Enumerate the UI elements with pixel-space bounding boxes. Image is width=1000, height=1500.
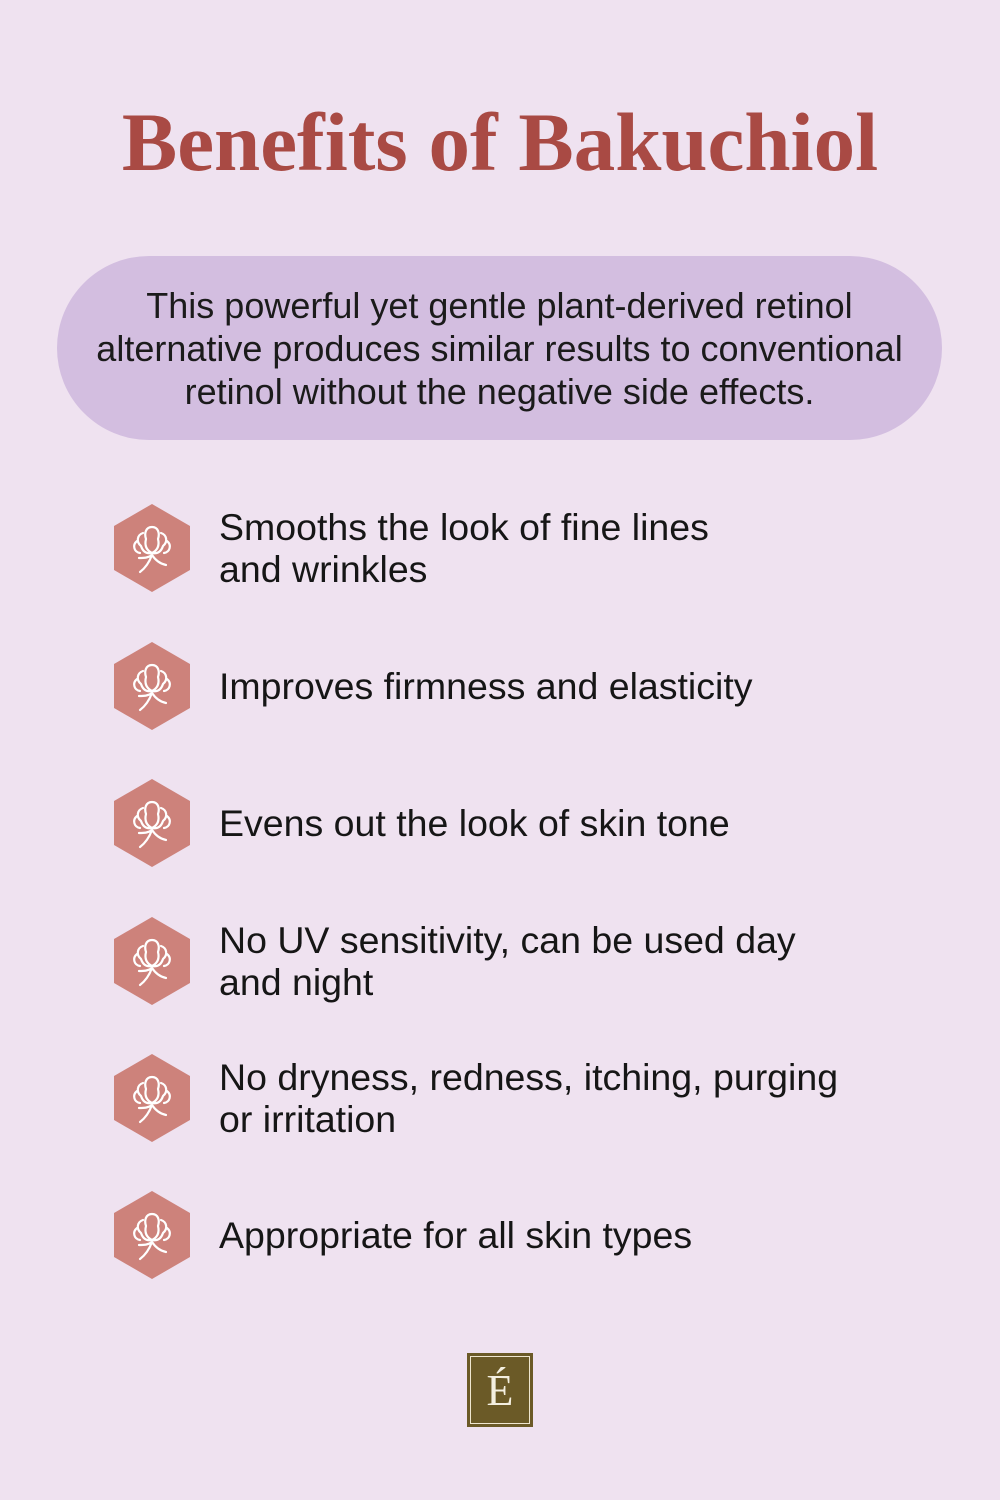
icon: lotus hexagon <box>114 779 190 867</box>
text: Smooths the look of fine lines <box>219 506 709 548</box>
text: or irritation <box>219 1098 396 1140</box>
text: and night <box>219 961 373 1003</box>
text <box>219 919 796 1003</box>
benefit 5 <box>114 1054 838 1142</box>
text: No dryness, redness, itching, purging <box>219 1056 838 1098</box>
benefit 6 <box>114 1191 692 1279</box>
icon: lotus hexagon <box>114 917 190 1005</box>
icon: lotus hexagon <box>114 504 190 592</box>
intro pill: retinol without the negative side effects. <box>185 370 814 412</box>
benefit 4 <box>114 917 796 1005</box>
title: Benefits of Bakuchiol <box>122 96 878 188</box>
icon: lotus hexagon <box>114 1054 190 1142</box>
icon: lotus hexagon <box>114 1191 190 1279</box>
logo <box>467 1353 533 1427</box>
text: Appropriate for all skin types <box>219 1214 692 1256</box>
text <box>219 1056 838 1140</box>
benefit 1 <box>114 504 709 592</box>
text: No UV sensitivity, can be used day <box>219 919 796 961</box>
benefit 3 <box>114 779 730 867</box>
intro pill: alternative produces similar results to conventional <box>96 328 903 368</box>
logo: É <box>487 1366 513 1415</box>
benefit 2 <box>114 642 753 730</box>
text: Evens out the look of skin tone <box>219 802 730 844</box>
text: and wrinkles <box>219 548 427 590</box>
icon: lotus hexagon <box>114 642 190 730</box>
intro pill <box>57 256 942 440</box>
text: Improves firmness and elasticity <box>219 665 753 707</box>
text <box>219 506 709 590</box>
intro pill: This powerful yet gentle plant-derived retinol <box>146 284 853 326</box>
